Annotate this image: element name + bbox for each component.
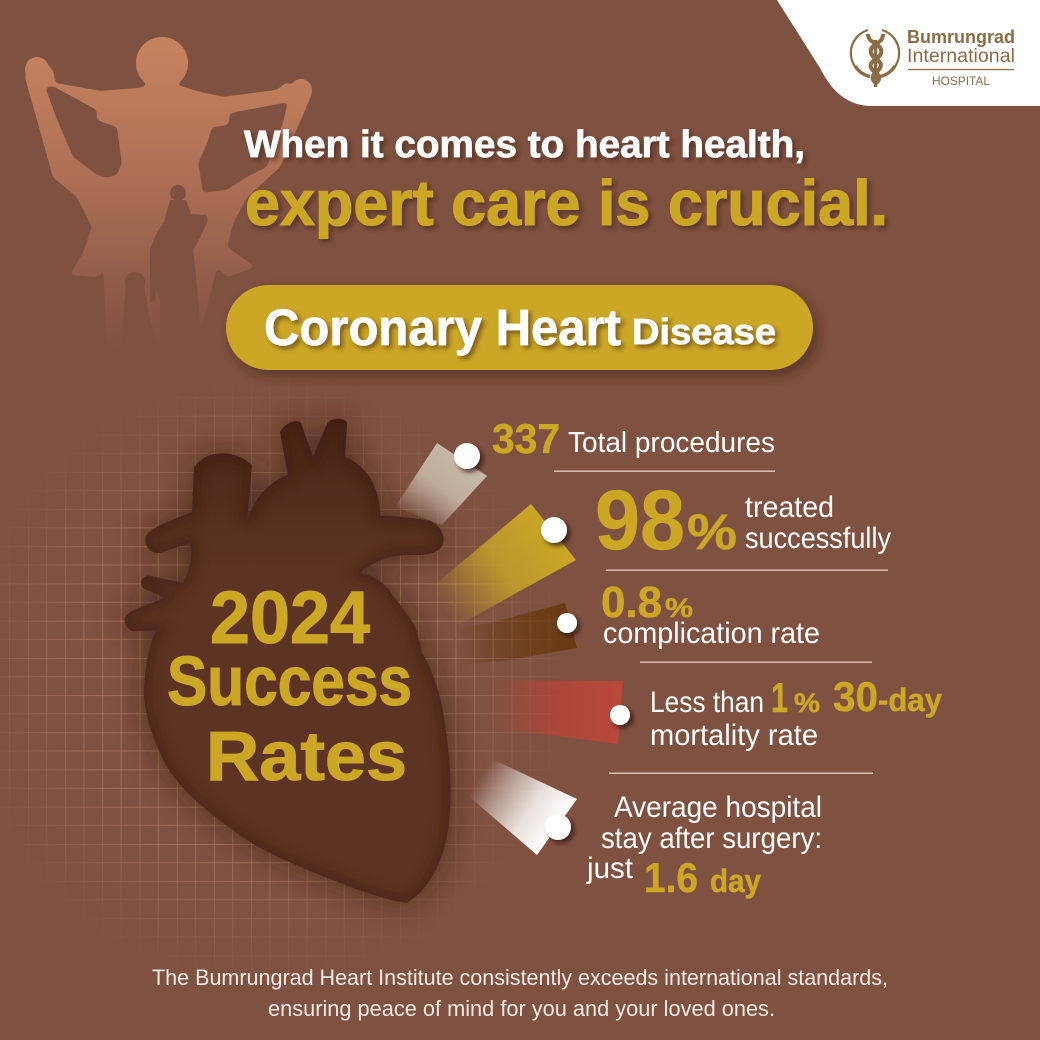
footer text: ensuring peace of mind for you and your loved ones. [268,996,775,1021]
stat: mortality rate: % [794,688,820,718]
footer text [152,965,888,1021]
ray: total procedures [395,443,487,525]
logo wordmark: Bumrungrad [907,27,1015,47]
stat: treated successfully: % [687,504,737,560]
ray: hospital stay [465,758,577,855]
stat: treated successfully: 98 [595,473,685,567]
stat: complication rate [601,578,820,650]
stat: total procedures: Total procedures [568,427,775,459]
stat: hospital stay: Average hospital [614,791,822,824]
stat: complication rate: complication rate [603,617,820,650]
logo panel [777,0,1040,106]
dots [454,443,630,840]
stat: mortality rate: Less than [650,686,764,719]
heart label: 2024 success rates [167,576,412,795]
small family figures [120,185,208,353]
title [244,124,888,239]
stat: total procedures: 337 [492,415,560,462]
ray: complication [460,603,577,664]
stat: hospital stay: stay after surgery: [601,822,822,855]
heart label: 2024 success rates: 2024 [210,576,370,659]
title: When it comes to heart health, [244,124,805,166]
stat: treated successfully: successfully [745,522,891,555]
icon: caduceus [851,30,899,87]
stat: hospital stay: day [710,863,761,899]
stat: hospital stay: just [586,852,634,885]
stat: hospital stay [586,791,822,901]
stat: complication rate: % [665,593,693,623]
heart label: 2024 success rates: Success [167,642,412,720]
pill: coronary heart disease [226,285,813,370]
footer text: The Bumrungrad Heart Institute consistently exceeds international standards, [152,965,888,990]
stat: total procedures [492,415,775,462]
ray: treated successfully [425,504,576,627]
logo wordmark [907,27,1015,88]
stat: treated successfully [595,473,891,567]
pill: coronary heart disease: Coronary Heart [264,299,621,356]
stat: hospital stay: 1.6 [644,854,698,901]
family silhouette [25,37,312,353]
heart [120,410,460,903]
logo wordmark: HOSPITAL [932,74,990,88]
rays [395,443,623,855]
ray: mortality [490,680,623,744]
title: expert care is crucial. [245,167,888,239]
stat: mortality rate: 1 [771,674,788,721]
stat: treated successfully: treated [745,491,834,524]
background grid [0,392,554,968]
stat: mortality rate [650,673,942,752]
stat: mortality rate: 30 [833,673,878,720]
stat: complication rate: 0.8 [601,578,662,627]
stat: mortality rate: mortality rate [650,719,818,752]
pill: coronary heart disease: Disease [632,311,776,352]
heart label: 2024 success rates: Rates [206,717,407,795]
logo wordmark: International [907,46,1015,67]
stat: mortality rate: -day [878,682,942,718]
